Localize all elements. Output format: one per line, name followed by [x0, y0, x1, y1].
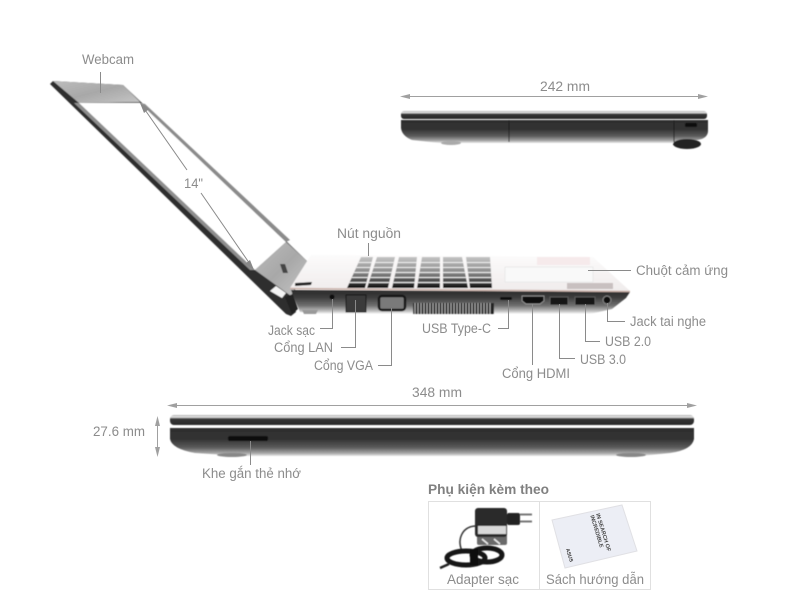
label: charging jack: Jack sạc: [268, 323, 315, 338]
label: USB 2.0: USB 2.0: [605, 334, 651, 349]
label: VGA port: Cổng VGA: [314, 358, 373, 373]
label: HDMI port: [502, 304, 570, 381]
port: USB 3.0: [550, 297, 568, 305]
keyboard: [345, 257, 495, 288]
vent: [413, 303, 494, 314]
accessories panel: [428, 482, 650, 590]
touchpad: [505, 257, 613, 289]
label: charging jack: [268, 299, 332, 338]
label: LAN port: [274, 300, 356, 355]
dimension: width 348 mm: [167, 385, 697, 408]
dimension: height 27.6 mm: [93, 416, 160, 457]
adapter icon: [440, 508, 532, 568]
label: Webcam: Webcam: [82, 52, 134, 67]
label: touchpad: [588, 263, 728, 278]
label: LAN port: Cổng LAN: [274, 340, 333, 355]
label: memory card slot: Khe gắn thẻ nhớ: [202, 466, 301, 481]
label: memory card slot: [202, 441, 301, 481]
dimension: width 348 mm: 348 mm: [412, 385, 462, 400]
label: power button: Nút nguồn: [337, 226, 401, 241]
manual label: Sách hướng dẫn: [546, 572, 644, 587]
port: LAN: [346, 295, 366, 312]
memory card slot: [228, 436, 268, 441]
accessories heading: Phụ kiện kèm theo: [428, 482, 549, 497]
port: HDMI: [522, 296, 544, 304]
port: USB 2.0: [575, 297, 595, 305]
dimension: screen size 14 inch: [140, 103, 254, 270]
label: USB 3.0: [560, 304, 626, 367]
label: power button: [337, 226, 401, 256]
label: headphone jack: Jack tai nghe: [630, 314, 706, 329]
manual icon: INCREDIBLE: [588, 515, 604, 549]
laptop base: [290, 255, 630, 314]
manual icon: [552, 505, 637, 568]
label: USB 3.0: USB 3.0: [580, 352, 626, 367]
label: USB Type-C: USB Type-C: [422, 321, 491, 336]
label: Webcam: [82, 52, 134, 93]
port: VGA: [379, 296, 405, 310]
back view of laptop: [401, 111, 708, 149]
laptop lid: [50, 81, 308, 316]
label: headphone jack: [608, 303, 706, 329]
dimension: depth 242 mm: 242 mm: [540, 79, 590, 94]
label: USB 2.0: [586, 304, 651, 349]
dimension: screen size 14 inch: 14": [184, 176, 203, 191]
dimension: depth 242 mm: [400, 79, 708, 99]
manual icon: IN SEARCH OF: [594, 513, 612, 553]
dimension: height 27.6 mm: 27.6 mm: [93, 424, 145, 439]
adapter label: Adapter sạc: [447, 572, 519, 587]
label: touchpad: Chuột cảm ứng: [636, 263, 728, 278]
manual icon: ASUS: [564, 548, 574, 564]
port: USB-C: [500, 297, 512, 300]
label: HDMI port: Cổng HDMI: [502, 366, 570, 381]
port: headphone jack: [603, 296, 611, 304]
adapter box: [428, 502, 540, 590]
port: charging jack: [330, 294, 334, 300]
label: USB Type-C: [422, 300, 508, 336]
open laptop side view: [50, 81, 630, 316]
front view of laptop: [170, 415, 694, 457]
manual box: [540, 502, 650, 590]
label: VGA port: [314, 308, 392, 373]
